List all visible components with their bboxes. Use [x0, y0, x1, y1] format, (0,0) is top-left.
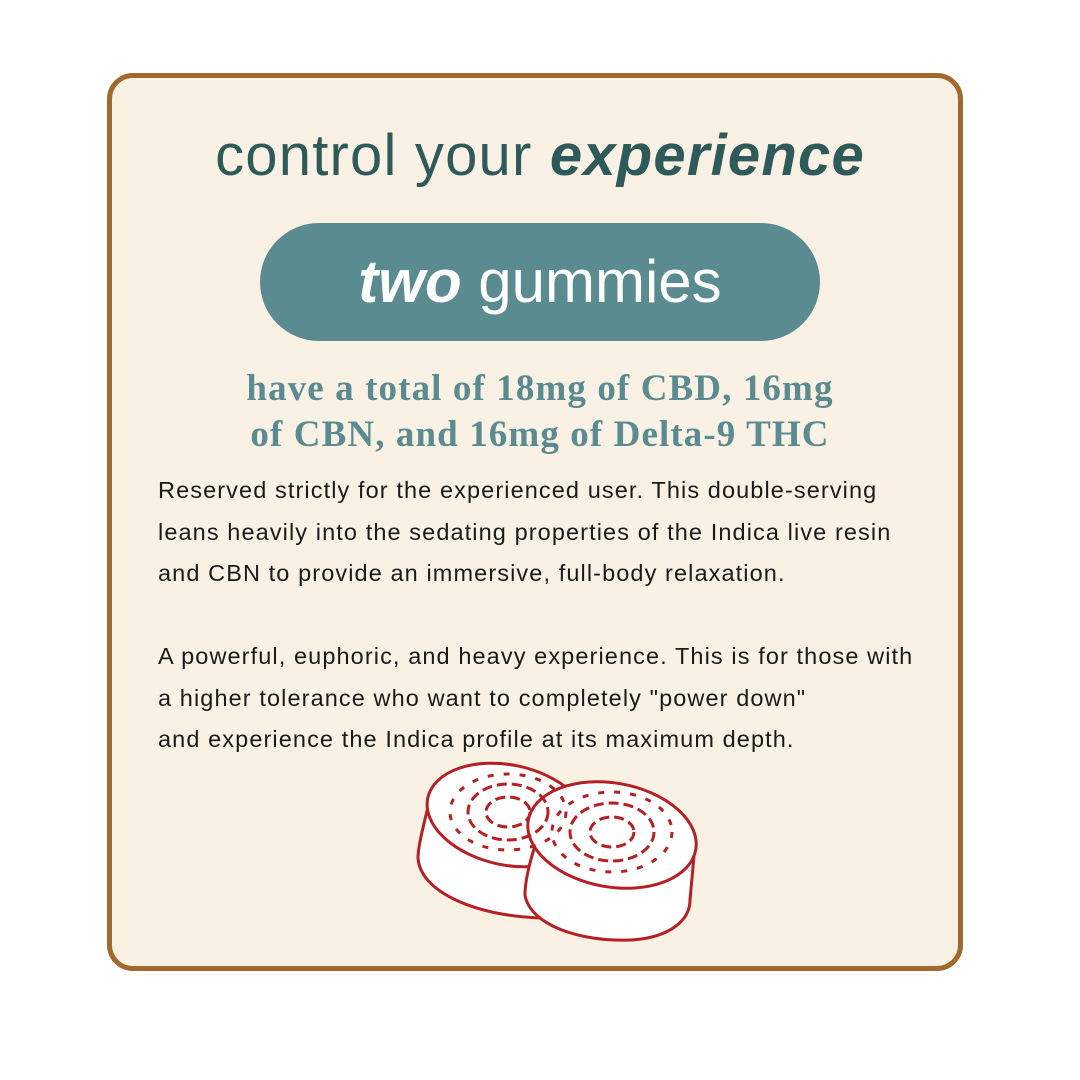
body text: Reserved strictly for the experienced user. This double-serving: [158, 477, 877, 503]
subtitle: have a total of 18mg of CBD, 16mg: [246, 368, 834, 409]
body text: a higher tolerance who want to completely "power down": [158, 684, 806, 710]
body text: [158, 477, 913, 752]
subtitle: of CBN, and 16mg of Delta-9 THC: [250, 414, 830, 455]
pill heading: [260, 223, 820, 341]
subtitle: [246, 368, 834, 455]
body text: A powerful, euphoric, and heavy experience. This is for those with: [158, 643, 913, 669]
pill heading: two gummies: [358, 248, 722, 315]
title: control your experience: [215, 123, 865, 188]
body text: and experience the Indica profile at its maximum depth.: [158, 726, 795, 752]
body text: leans heavily into the sedating properties of the Indica live resin: [158, 518, 891, 544]
body text: and CBN to provide an immersive, full-body relaxation.: [158, 560, 786, 586]
panel: card: [107, 73, 963, 971]
